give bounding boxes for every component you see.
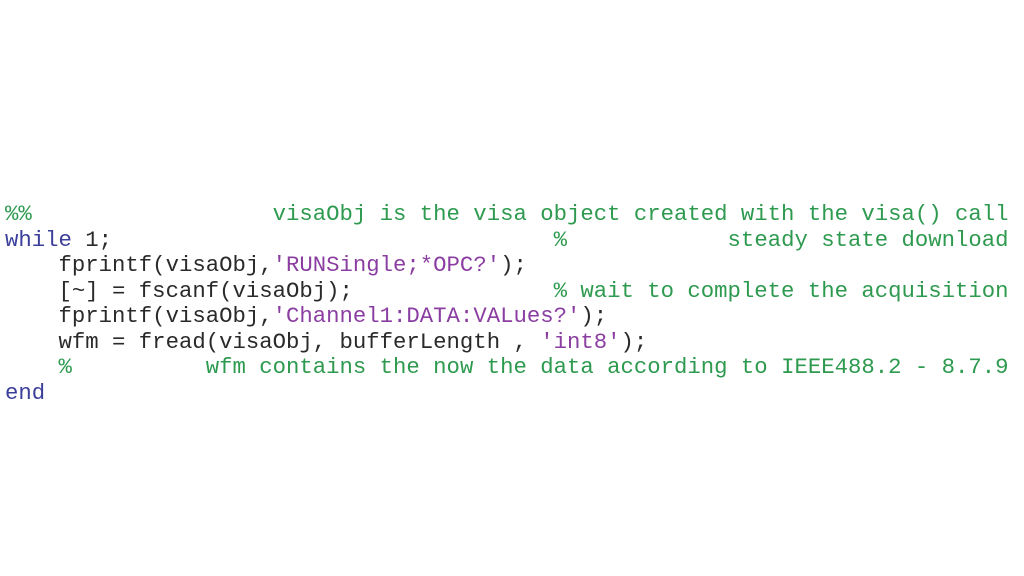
code block: %% visaObj is the visa object created with the visa() call while 1; % steady state download fprintf(visaObj,'RUNSingle;*OPC?'); [~] = fscanf(visaObj); % wait to complete the acquisition fprintf(visaObj,'Channel1:DATA:VALues?'); wfm = fread(visaObj, bufferLength , 'int8'); % wfm contains the now the data according to IEEE488.2 - 8.7.9 end xyxy=(5,201,1009,406)
